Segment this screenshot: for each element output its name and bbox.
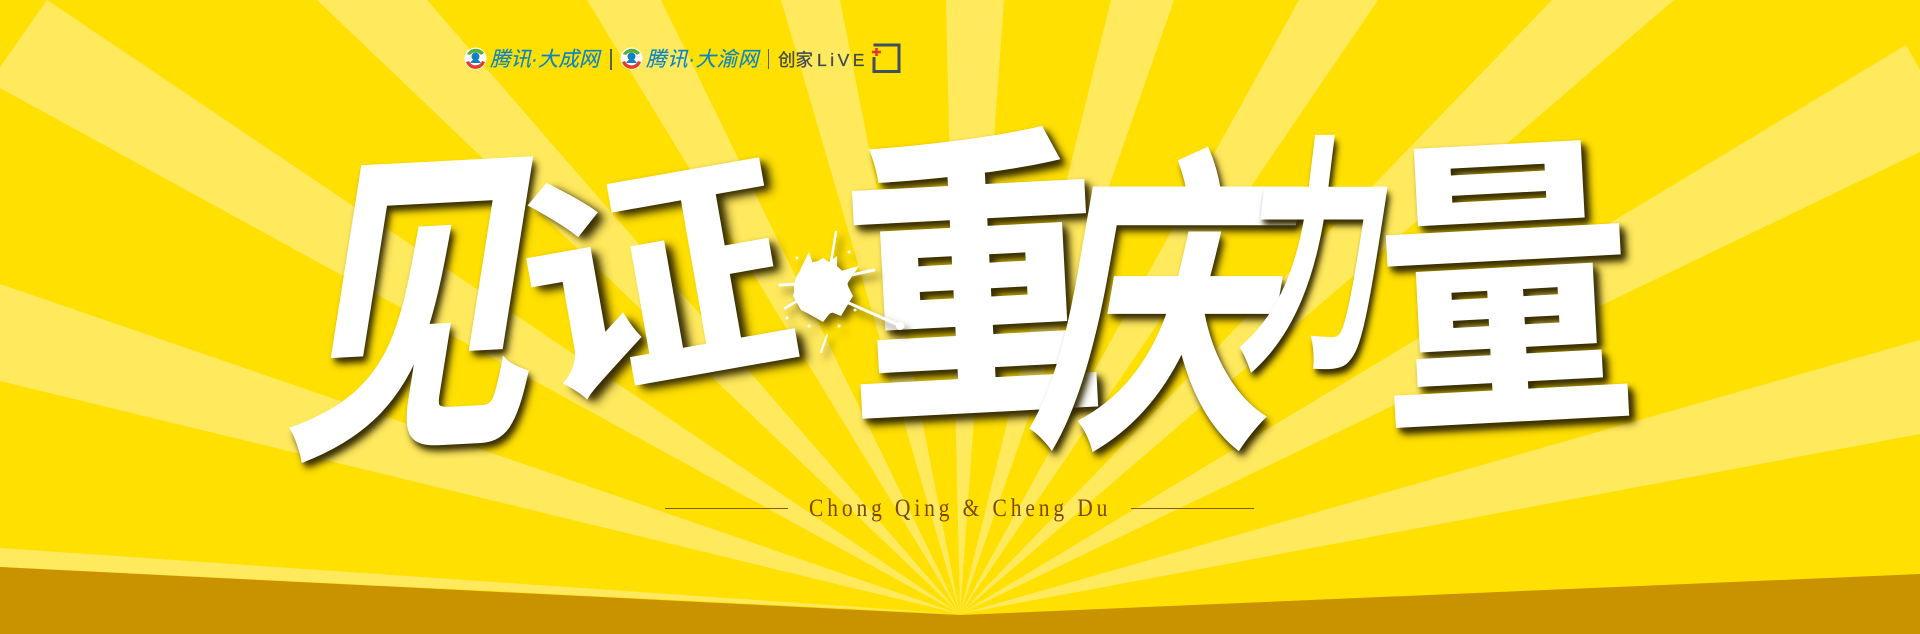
text: 腾讯·大渝网: 腾讯·大渝网	[646, 48, 759, 71]
logo row	[464, 44, 900, 73]
icon: ink splatter	[778, 230, 914, 361]
divider	[768, 49, 769, 69]
title character 力: 力	[1225, 58, 1415, 420]
title character 重: 重	[832, 32, 1112, 487]
divider	[610, 49, 612, 70]
subtitle text: Chong Qing & Cheng Du	[809, 495, 1111, 522]
title character 证: 证	[491, 69, 816, 458]
logo: Tencent Dacheng	[464, 48, 602, 71]
text: 腾讯·大成网: 腾讯·大成网	[490, 48, 599, 71]
logo: Chuangjia LiVE	[778, 44, 900, 73]
title character 见: 见	[267, 38, 589, 528]
title character 庆: 庆	[1011, 52, 1336, 515]
icon: bracket square with red plus	[872, 44, 900, 73]
text: 创家 LiVE: 创家LiVE	[778, 50, 868, 70]
title: 见证重庆力量	[267, 32, 1643, 528]
rule right	[1131, 508, 1254, 509]
logo: Tencent Dayu	[620, 48, 761, 71]
title character 量: 量	[1365, 35, 1643, 496]
rule left	[665, 508, 788, 509]
icon: Tencent globe	[464, 48, 486, 70]
icon: Tencent globe	[620, 48, 642, 70]
